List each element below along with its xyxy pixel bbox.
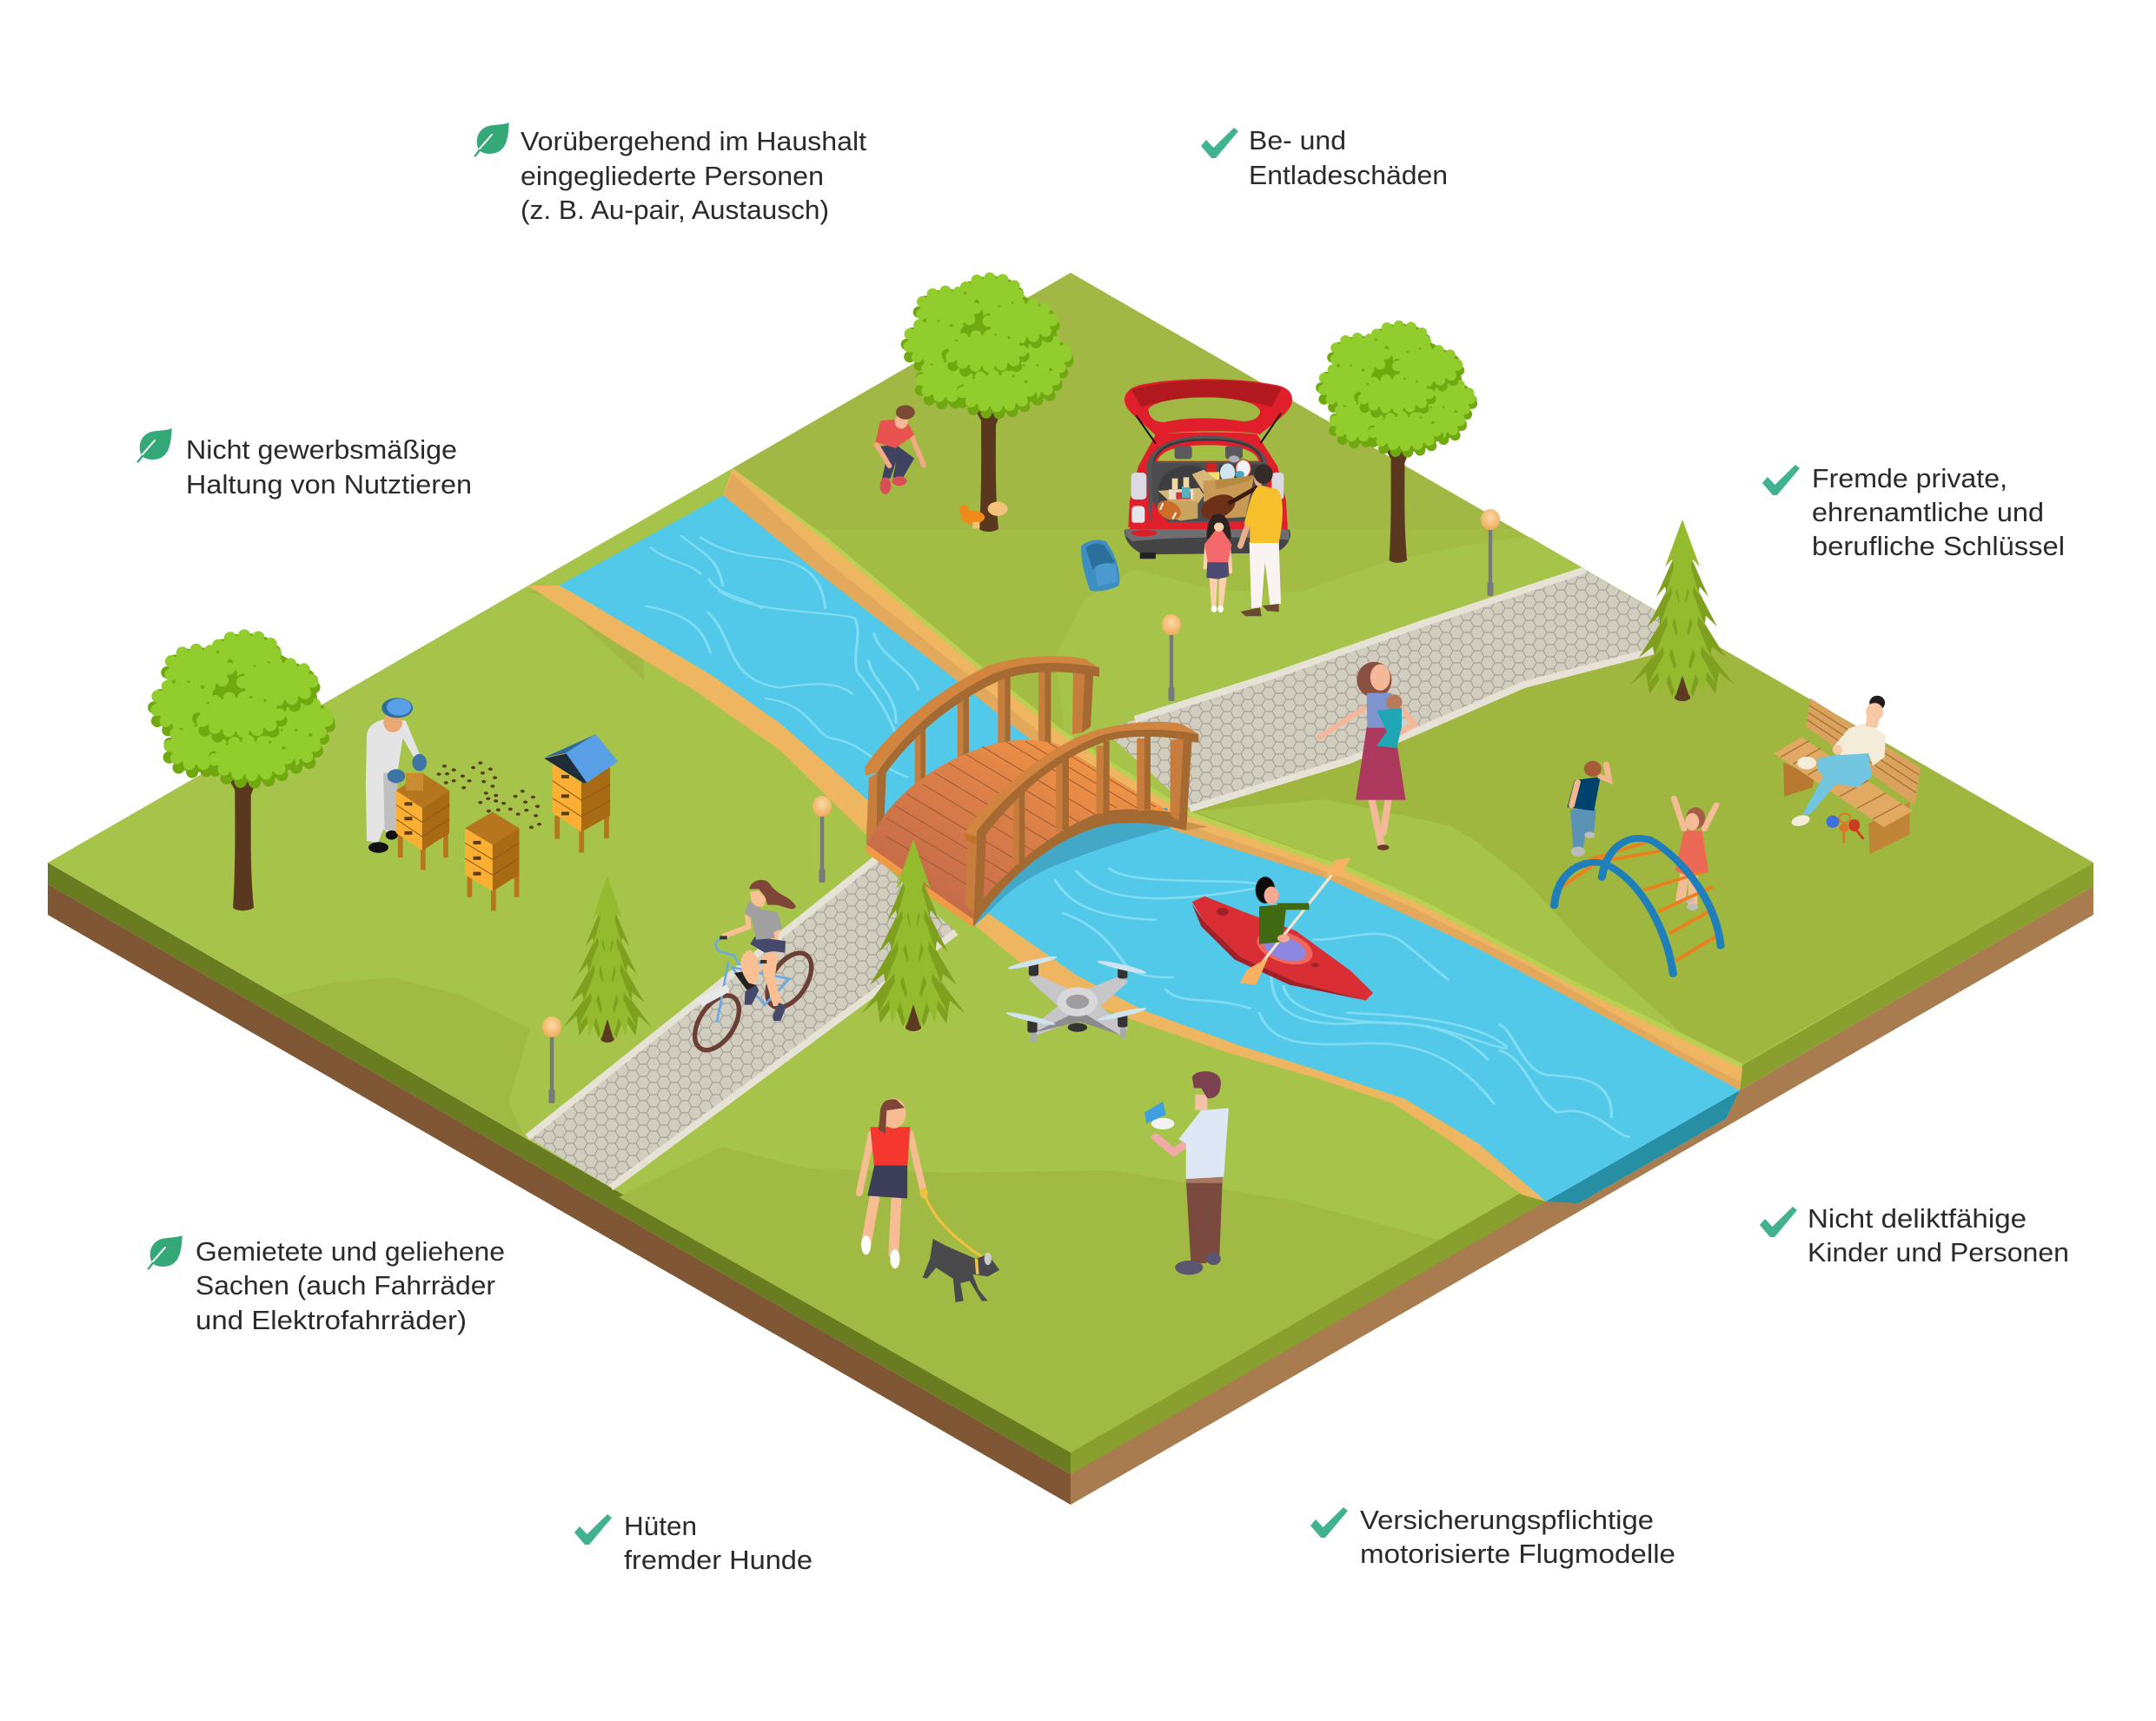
squirrel xyxy=(959,502,1008,528)
water ripples top of river xyxy=(651,536,826,608)
pine tree near lamp xyxy=(563,876,652,1043)
terrain block: isometric ground slab xyxy=(48,273,2093,1505)
label: non-commercial livestock: Haltung von Nutztieren xyxy=(186,470,472,500)
girl standing at car xyxy=(1204,514,1231,612)
beehive 1 xyxy=(396,773,449,870)
icon: check mark xyxy=(1201,128,1238,158)
pine tree back right xyxy=(1630,520,1735,701)
tree: far left xyxy=(154,635,329,910)
man sitting on bench xyxy=(1789,696,1886,828)
man standing at car xyxy=(1240,464,1283,616)
bees swarm xyxy=(436,761,541,829)
label: children without tort capacity: Kinder und Personen xyxy=(1808,1238,2069,1268)
label: keys: Fremde private, xyxy=(1812,464,2007,493)
icon: check mark xyxy=(1310,1507,1348,1538)
icon: leaf xyxy=(474,122,509,156)
backpack xyxy=(1081,539,1119,592)
label: model aircraft xyxy=(1310,1506,1675,1569)
cyclist on bike xyxy=(686,880,820,1058)
playground climbing arch back xyxy=(1555,838,1663,905)
icon: check mark xyxy=(1762,465,1800,495)
children on playground: boy xyxy=(1567,761,1609,857)
person crouching xyxy=(875,405,924,494)
cobblestone path: right section xyxy=(1104,570,1695,809)
label: non-commercial livestock xyxy=(136,428,472,500)
label: rented and borrowed items: Sachen (auch Fahrräder xyxy=(196,1271,495,1301)
bridge shadow on water xyxy=(973,808,1208,927)
woman walking dog xyxy=(859,1098,983,1268)
label: rented and borrowed items xyxy=(147,1235,505,1335)
river with banks xyxy=(528,468,1742,1203)
label: dog sitting: Hüten xyxy=(624,1512,697,1541)
icon: check mark xyxy=(574,1514,612,1545)
children on playground: girl xyxy=(1674,798,1716,910)
icon: check mark xyxy=(1760,1207,1797,1237)
cobblestone path: left section xyxy=(527,858,956,1188)
label: model aircraft: motorisierte Flugmodelle xyxy=(1360,1539,1675,1569)
label: loading damage: Be- und xyxy=(1249,126,1346,156)
label: keys xyxy=(1762,464,2065,561)
label: temporary household members xyxy=(474,122,867,225)
tree: back left xyxy=(906,278,1068,532)
grass: right quadrant xyxy=(1190,633,2093,1063)
grass: back quadrant xyxy=(733,273,1695,731)
label: loading damage xyxy=(1201,126,1448,190)
label: rented and borrowed items: Gemietete und geliehene xyxy=(196,1237,505,1267)
beekeeper xyxy=(366,698,427,853)
beehive 3 with blue roof xyxy=(544,734,618,852)
label: dog sitting: fremder Hunde xyxy=(624,1546,813,1575)
icon: leaf xyxy=(136,428,172,462)
tree: back right xyxy=(1321,326,1472,563)
water ripples lower river xyxy=(1055,869,1629,1137)
wooden bench xyxy=(1774,698,1920,854)
man with drone controller xyxy=(1144,1071,1229,1274)
label: loading damage: Entladeschäden xyxy=(1249,161,1448,190)
water ripples upper river xyxy=(647,591,919,777)
label: model aircraft: Versicherungspflichtige xyxy=(1360,1506,1654,1535)
label: keys: ehrenamtliche und xyxy=(1812,498,2044,527)
label: rented and borrowed items: und Elektrofahrräder) xyxy=(196,1306,467,1335)
icon: leaf xyxy=(147,1235,182,1270)
kayak with paddler xyxy=(1192,857,1373,1001)
dog xyxy=(923,1239,999,1302)
label: temporary household members: eingegliederte Personen xyxy=(521,162,824,191)
pine tree on path xyxy=(861,839,965,1031)
wooden bridge xyxy=(865,656,1198,927)
label: non-commercial livestock: Nicht gewerbsmäßige xyxy=(186,435,457,465)
beehive 2 xyxy=(465,811,519,910)
label: temporary household members: (z. B. Au-pair, Austausch) xyxy=(521,195,829,225)
label: dog sitting xyxy=(574,1512,813,1575)
playground climbing arch front xyxy=(1555,838,1721,974)
drone xyxy=(1005,955,1147,1043)
label: temporary household members: Vorübergehend im Haushalt xyxy=(521,127,867,156)
woman carrying baby xyxy=(1319,662,1414,851)
grass: front and left hills xyxy=(278,591,1439,1453)
street lamps xyxy=(542,509,1500,1103)
label: children without tort capacity xyxy=(1760,1204,2069,1268)
label: keys: berufliche Schlüssel xyxy=(1812,532,2065,561)
car with open tailgate xyxy=(1124,379,1292,559)
label: children without tort capacity: Nicht deliktfähige xyxy=(1808,1204,2027,1234)
keys on ground xyxy=(1826,813,1863,844)
